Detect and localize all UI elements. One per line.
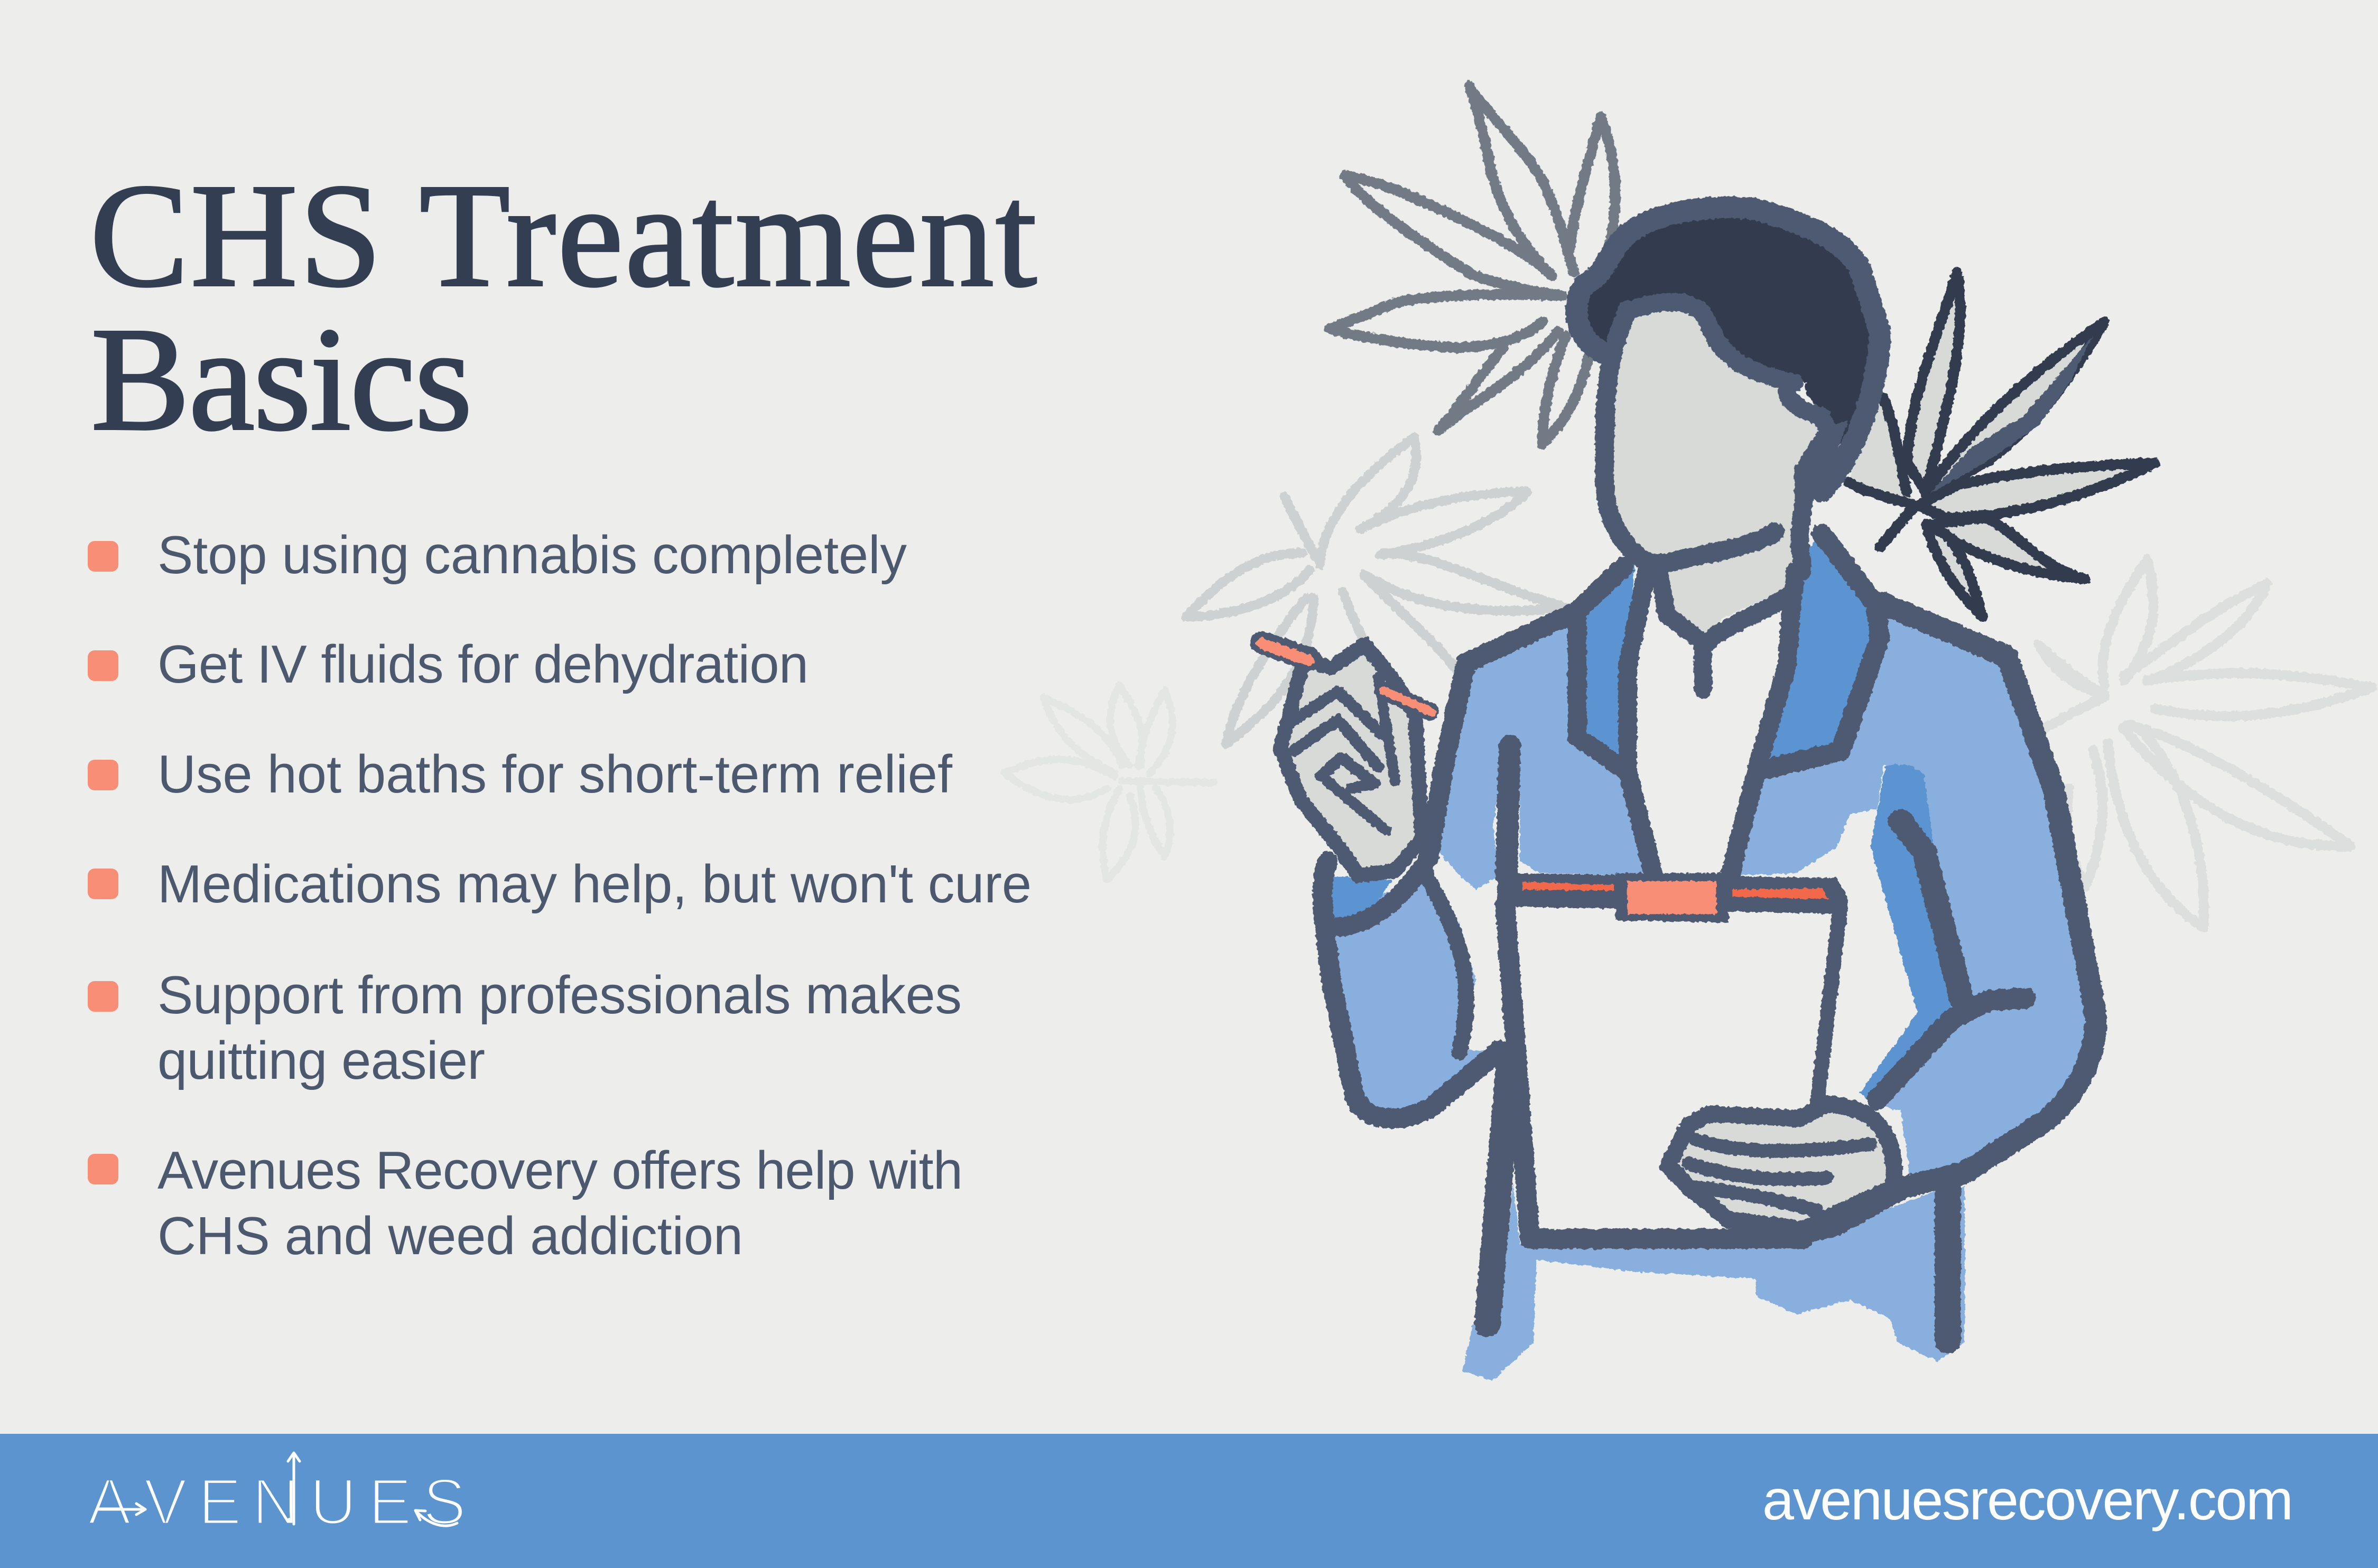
bullet: Avenues Recovery <box>88 1141 963 1266</box>
ear shadow <box>1795 421 1848 501</box>
title: Basics <box>91 297 472 461</box>
face <box>1604 305 1822 562</box>
clipboard <box>1507 899 1840 1236</box>
footer bar <box>0 1434 2378 1568</box>
pen <box>1262 642 1433 712</box>
icon: dark outlined cannabis leaf <box>1848 272 2155 617</box>
jacket left panel <box>1439 611 1655 890</box>
neck <box>1659 525 1795 642</box>
bullet list <box>88 526 1032 1266</box>
lapel fill right <box>1759 534 1880 767</box>
inner sleeve fold <box>1901 822 1961 998</box>
jacket and clipboard <box>1280 534 2096 1380</box>
body silhouette mask <box>1432 569 2096 1342</box>
logo arrows <box>97 1453 457 1526</box>
jacket shadow strip <box>1860 764 1951 1104</box>
icon: pale left cannabis leaf <box>1186 437 1566 744</box>
collar <box>1659 570 1795 690</box>
bullet: medications: Medications may help, but won't cure <box>157 855 1032 914</box>
logo: Avenues: AVENUES <box>88 1466 466 1538</box>
website url: avenuesrecovery.com <box>1762 1468 2293 1532</box>
jacket right panel and sleeve <box>1735 605 2096 1178</box>
left sleeve outline <box>1323 861 1500 1118</box>
bullet: professional support: quitting easier <box>157 1031 485 1090</box>
clipboard clip <box>1615 873 1729 922</box>
bullet: professional support: Support from professionals makes <box>157 966 962 1025</box>
bullet: Avenues Recovery: CHS and weed addiction <box>157 1207 743 1266</box>
left sleeve <box>1331 866 1493 1116</box>
lapel fill left <box>1577 564 1634 772</box>
body side lines and legs <box>1507 746 1510 875</box>
sleeve cuff <box>1331 875 1392 925</box>
icon: pale right leaf lower leaflets <box>2067 725 2351 928</box>
hair <box>1576 207 1880 444</box>
title <box>90 153 1037 461</box>
hairline <box>1632 302 1828 572</box>
hair outline <box>1576 207 1880 491</box>
lower hand <box>1668 1104 1894 1229</box>
face outline <box>1604 310 1775 565</box>
bullet: Avenues Recovery: Avenues Recovery offers help with <box>157 1141 963 1200</box>
clipboard top bar <box>1496 873 1848 914</box>
bullet: stop using cannabis: Stop using cannabis completely <box>157 526 907 585</box>
jacket outline <box>1429 567 1623 856</box>
lower jacket <box>1463 1182 1965 1380</box>
icon: palest cannabis leaf <box>1004 685 1213 880</box>
icon: grey cannabis leaf behind head <box>1329 86 1615 444</box>
head <box>1576 207 1880 690</box>
illustration: person with clipboard and cannabis leaves <box>1004 86 2372 1380</box>
bullet: professional support <box>88 966 962 1090</box>
bullet: hot baths: Use hot baths for short-term relief <box>157 745 953 804</box>
bullet: IV fluids: Get IV fluids for dehydration <box>157 635 809 694</box>
upper hand <box>1280 645 1422 875</box>
icon: pale right cannabis leaf <box>2039 560 2372 732</box>
title: CHS Treatment <box>90 153 1037 318</box>
